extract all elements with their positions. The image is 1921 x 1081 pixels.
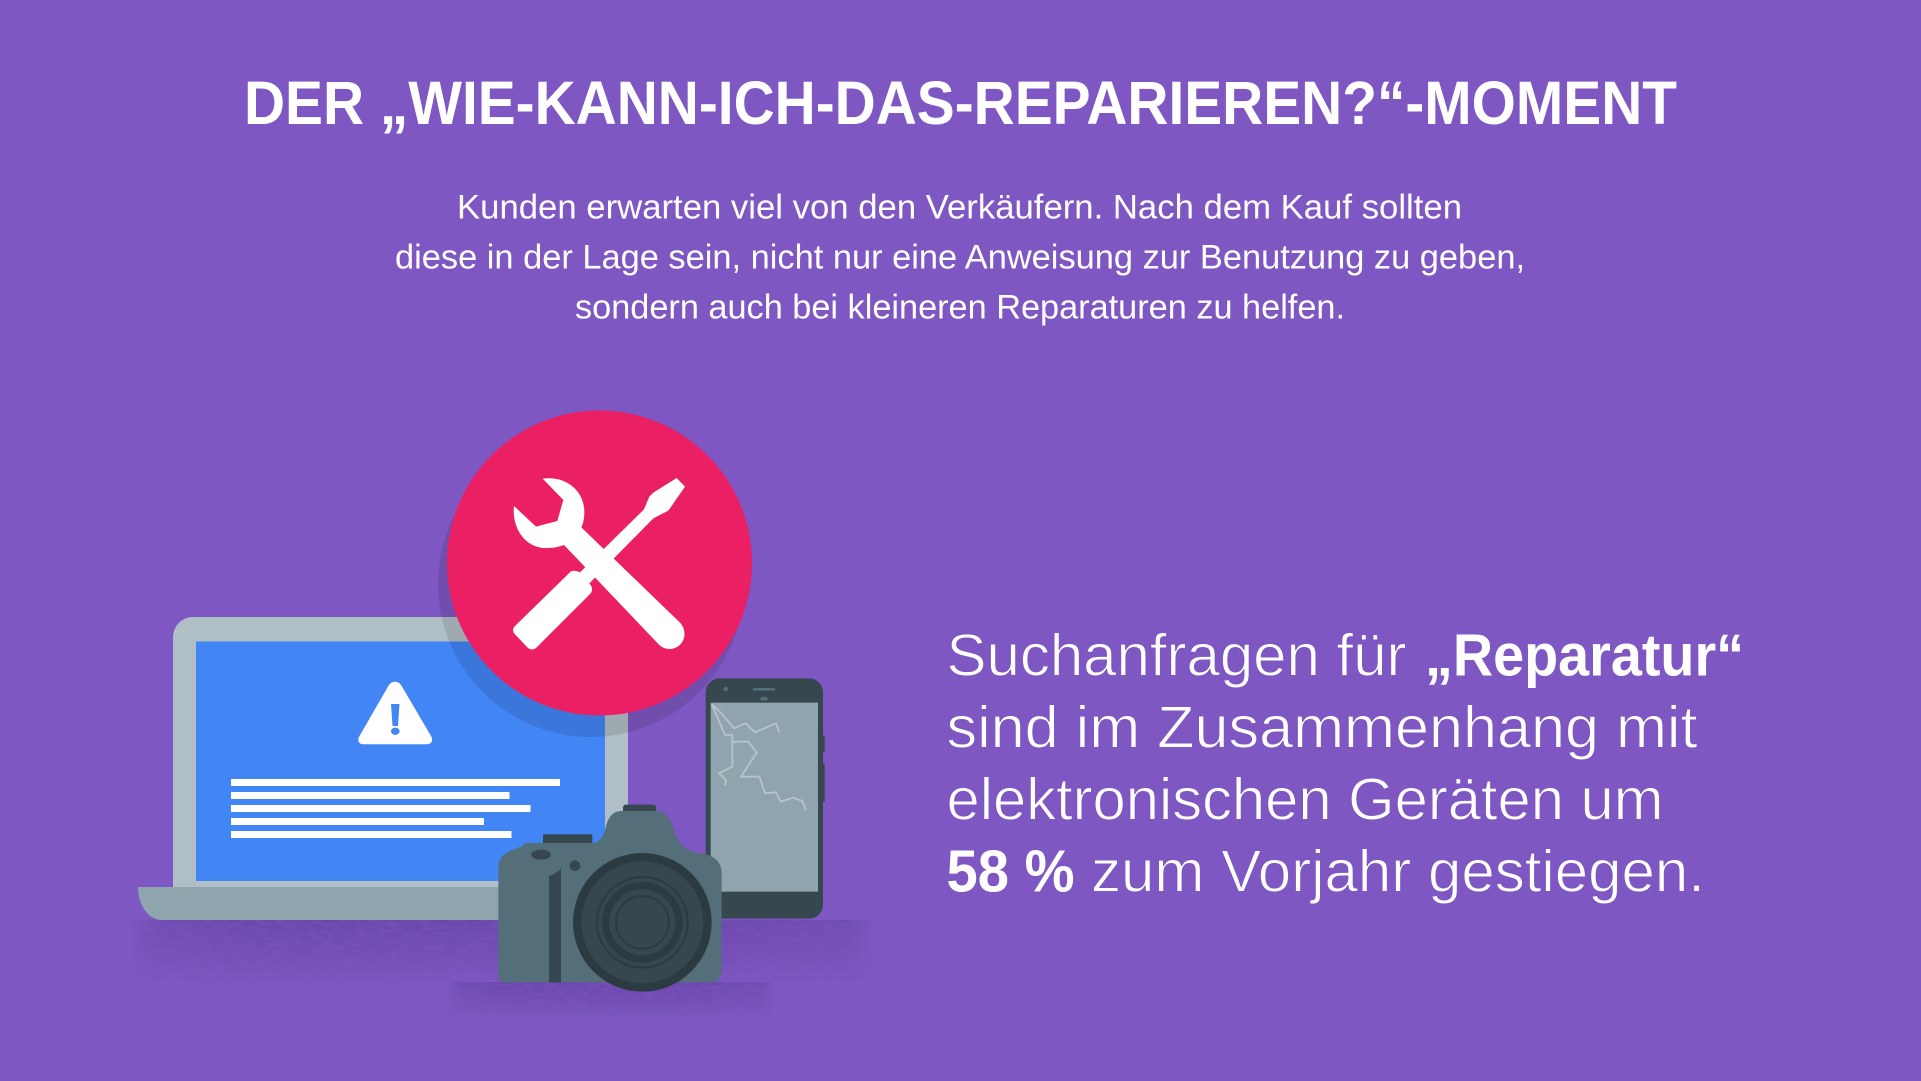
- camera: [498, 805, 722, 992]
- title: DER „WIE-KANN-ICH-DAS-REPARIEREN?“-MOMENT: [244, 69, 1677, 137]
- intro text block: [395, 188, 1525, 326]
- intro text block: diese in der Lage sein, nicht nur eine Anweisung zur Benutzung zu geben,: [395, 238, 1525, 276]
- phone body: [706, 678, 823, 919]
- key statistic text: Suchanfragen für: [946, 622, 1406, 688]
- camera body: [498, 811, 722, 982]
- laptop lid: [173, 617, 628, 887]
- tool badge shadow: [438, 431, 744, 737]
- icon: warning triangle: [358, 682, 432, 744]
- intro text block: sondern auch bei kleineren Reparaturen zu helfen.: [575, 288, 1345, 326]
- intro text block: Kunden erwarten viel von den Verkäufern. Nach dem Kauf sollten: [457, 188, 1462, 226]
- laptop screen: [196, 642, 605, 881]
- phone side buttons: [822, 736, 825, 802]
- error message lines: [231, 779, 560, 838]
- tool badge: [447, 410, 752, 716]
- camera details: [531, 850, 551, 860]
- key statistic text: sind im Zusammenhang mit: [946, 694, 1698, 760]
- key statistic text: [946, 622, 1744, 904]
- key statistic text: zum Vorjahr gestiegen.: [1091, 838, 1705, 904]
- key statistic text: „Reparatur“: [1425, 622, 1744, 688]
- icon: wrench and screwdriver: [513, 478, 685, 649]
- key statistic text: elektronischen Geräten um: [946, 766, 1664, 832]
- laptop base: [138, 887, 662, 920]
- phone camera, speaker and sensor: [723, 687, 775, 701]
- phone screen: [711, 703, 818, 892]
- camera grip strip: [549, 868, 561, 982]
- floor shadow: laptop and phone: [142, 920, 861, 966]
- key statistic text: 58 %: [946, 838, 1074, 904]
- illustration: devices needing repair: [130, 410, 874, 1018]
- laptop: [138, 617, 662, 920]
- phone with cracked screen: [706, 678, 825, 919]
- camera flash shoe and top dial: [543, 805, 656, 846]
- floor shadow: camera: [453, 982, 768, 1008]
- screen cracks: [712, 704, 806, 810]
- camera lens: [573, 853, 712, 992]
